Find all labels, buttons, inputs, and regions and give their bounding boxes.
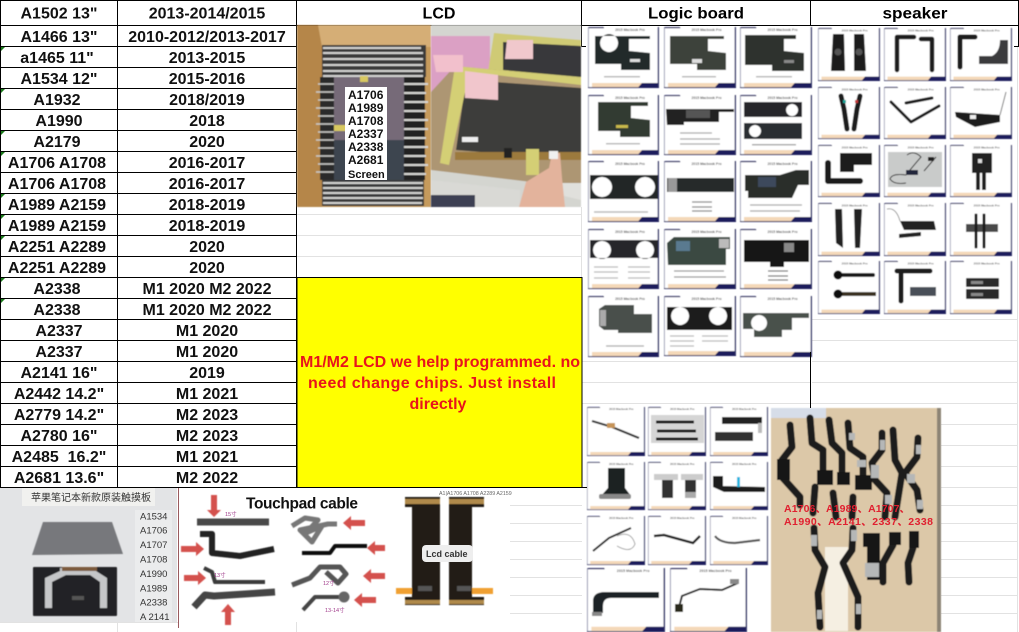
row A2337	[35, 323, 238, 340]
photo: boxed LCD screens	[297, 25, 431, 207]
card: logic board 5	[664, 95, 736, 155]
card: logic board 10	[588, 229, 659, 289]
row A1989 A2159 second: A1989 A2159	[8, 218, 106, 235]
card: logic board 4	[588, 95, 659, 155]
row A2681	[14, 470, 238, 487]
label: trackpad models: A1989	[140, 584, 167, 594]
card: speaker 7	[818, 145, 880, 197]
card: speaker 14	[884, 261, 946, 314]
row A1706 A1708 second	[8, 176, 245, 193]
cable size labels: 12寸	[323, 579, 335, 587]
row A2779: M2 2023	[176, 407, 238, 424]
LCD ribbons	[396, 497, 493, 605]
row A2779	[14, 407, 238, 424]
card: speaker 1	[818, 28, 880, 81]
table lines	[0, 0, 1019, 488]
row A2141: 2019	[189, 365, 225, 382]
row A1932: A1932	[33, 92, 81, 109]
LCD cable model note: A1|A1706 A1708 A2289 A2159	[439, 491, 512, 497]
card: logic board 6	[740, 95, 812, 155]
row A1466: A1466 13"	[21, 29, 97, 46]
card: cable 11	[670, 568, 747, 632]
row A2485: M1 2021	[176, 449, 238, 466]
card: speaker 15	[950, 261, 1012, 314]
label: trackpad models: A1708	[140, 554, 167, 566]
row A2141: A2141 16"	[21, 365, 97, 382]
row A2251 A2289: 2020	[189, 239, 225, 256]
row A2251 A2289 second: A2251 A2289	[8, 260, 106, 277]
card: cable 9	[710, 516, 768, 565]
label: trackpad models: A2338	[140, 598, 167, 608]
card: logic board 12	[740, 229, 812, 289]
card: logic board 3	[740, 27, 812, 88]
row A2338 second: A2338	[33, 302, 81, 319]
row A2780	[21, 428, 238, 445]
label: heat pipe models: A1990、A2141、2337、2338	[784, 516, 933, 528]
row A1990	[35, 113, 225, 130]
heading: Logic board: Logic board	[648, 6, 744, 22]
cable size labels: 13-14寸	[325, 606, 345, 614]
card: cable 6	[710, 462, 768, 510]
heading: speaker: speaker	[882, 6, 948, 22]
card: speaker 9	[950, 145, 1012, 197]
card: cable 5	[648, 462, 706, 510]
row A2337: A2337	[35, 323, 83, 340]
label: heat pipe models	[784, 503, 933, 528]
card: logic board 1	[588, 27, 659, 88]
card: speaker 4	[818, 87, 880, 139]
label: LCD models: A1989	[348, 101, 384, 115]
row A2485	[12, 449, 238, 466]
card: logic board 9	[740, 161, 812, 222]
label: Lcd cable: Lcd cable	[426, 549, 468, 559]
callout: M1/M2 LCD note: directly	[410, 396, 467, 413]
trackpad underside	[33, 567, 117, 616]
card: speaker 6	[950, 87, 1012, 139]
card: logic board 14	[664, 296, 736, 356]
row A2251 A2289 second	[8, 260, 225, 277]
row A2338 second	[33, 302, 272, 319]
row A1989 A2159 second: 2018-2019	[169, 218, 245, 235]
label: LCD models: A2337	[348, 127, 384, 141]
row A2251 A2289 second: 2020	[189, 260, 225, 277]
photo: LCD panels on cardboard	[431, 25, 581, 207]
row A1706 A1708 second: A1706 A1708	[8, 176, 106, 193]
cable size labels: 13寸	[214, 571, 226, 579]
row A1989 A2159	[8, 197, 245, 214]
row A1706 A1708 second: 2016-2017	[169, 176, 245, 193]
row A1534: A1534 12"	[21, 71, 97, 88]
card: cable 10	[587, 568, 665, 632]
card: speaker 3	[950, 28, 1012, 81]
label: LCD models	[345, 87, 387, 181]
row A2179: 2020	[189, 134, 225, 151]
label: trackpad models	[135, 510, 172, 623]
card: logic board 7	[588, 161, 659, 222]
row A2337: M1 2020	[176, 323, 238, 340]
label: trackpad models: A1707	[140, 540, 167, 551]
card: speaker 11	[884, 203, 946, 256]
row A2780: M2 2023	[176, 428, 238, 445]
row A1989 A2159: A1989 A2159	[8, 197, 106, 214]
row A2251 A2289: A2251 A2289	[8, 239, 106, 256]
row a1465: 2013-2015	[169, 50, 245, 67]
photo: trackpad	[0, 488, 177, 623]
label: trackpad title: 苹果笔记本新款原装触摸板	[31, 491, 151, 504]
callout: M1/M2 LCD note: need change chips. Just install	[308, 375, 556, 392]
row A1990: A1990	[35, 113, 83, 130]
label: trackpad models: A1706	[140, 526, 167, 536]
cable size labels	[214, 510, 345, 614]
row A2338: A2338	[33, 281, 81, 298]
card: speaker 2	[884, 28, 946, 81]
row A2251 A2289	[8, 239, 225, 256]
row A2338: M1 2020 M2 2022	[143, 281, 272, 298]
row A1502: A1502 13"	[21, 6, 97, 22]
table rows	[8, 6, 286, 487]
row A1990: 2018	[189, 113, 225, 130]
row A1706 A1708	[8, 155, 245, 172]
card: speaker 10	[818, 203, 880, 256]
card: cable 8	[648, 516, 706, 565]
row A1466: 2010-2012/2013-2017	[128, 29, 286, 46]
row A2141	[21, 365, 225, 382]
row A2337 second: A2337	[35, 344, 83, 361]
label: trackpad title	[22, 488, 155, 506]
compatibility table	[0, 0, 1019, 488]
column headings	[423, 6, 948, 22]
label: LCD models: A2681	[348, 153, 384, 167]
cable size labels: 15寸	[225, 510, 237, 518]
photo: touchpad cables	[178, 488, 385, 628]
row A2179: A2179	[33, 134, 81, 151]
card: speaker 8	[884, 145, 946, 197]
label: LCD models: Screen	[348, 169, 385, 181]
red model arrows	[181, 495, 385, 625]
card: speaker 12	[950, 203, 1012, 256]
label: heat pipe models: A1706、A1989、A1707、	[784, 503, 910, 515]
row A1989 A2159: 2018-2019	[169, 197, 245, 214]
row A1989 A2159 second	[8, 218, 245, 235]
card: logic board 15	[740, 296, 812, 357]
card: logic board 8	[664, 161, 736, 222]
black border fragments	[582, 352, 810, 488]
panel: speakers	[818, 28, 1012, 314]
card: cable 7	[587, 516, 645, 565]
row A2442: M1 2021	[176, 386, 238, 403]
row A2681: M2 2022	[176, 470, 238, 487]
row A1706 A1708: 2016-2017	[169, 155, 245, 172]
row A1534: 2015-2016	[169, 71, 245, 88]
card: cable 2	[648, 407, 706, 456]
label: LCD models: A2338	[348, 140, 384, 154]
card: cable 1	[587, 407, 645, 456]
label: trackpad models: A1990	[140, 569, 167, 580]
card: cable 3	[710, 407, 768, 456]
row A2338 second: M1 2020 M2 2022	[143, 302, 272, 319]
card: logic board 11	[664, 229, 736, 289]
row A2442	[14, 386, 238, 403]
row A1706 A1708: A1706 A1708	[8, 155, 106, 172]
panel: internal cables	[587, 407, 768, 632]
row A2779: A2779 14.2"	[14, 407, 104, 424]
card: logic board 2	[664, 27, 736, 88]
heading: LCD: LCD	[423, 6, 455, 22]
trackpad top face	[32, 522, 123, 555]
label: trackpad models: A1534	[140, 512, 167, 522]
row A2681: A2681 13.6"	[14, 470, 104, 487]
row A2485: A2485 16.2"	[12, 449, 106, 466]
row A1932	[33, 92, 245, 109]
row A2780: A2780 16"	[21, 428, 97, 445]
label: LCD models: A1706	[348, 88, 384, 102]
card: speaker 5	[884, 87, 946, 139]
row a1465	[20, 50, 245, 67]
row A2338	[33, 281, 272, 298]
heading: Touchpad cable: Touchpad cable	[246, 496, 358, 512]
photo: LCD cable	[396, 491, 512, 605]
row A2337 second: M1 2020	[176, 344, 238, 361]
label: trackpad models: A 2141	[140, 612, 170, 623]
photo: heat pipes	[771, 408, 941, 632]
row A2179	[33, 134, 225, 151]
label: LCD models: A1708	[348, 114, 384, 128]
spreadsheet note markers	[1, 47, 5, 303]
cable shapes	[194, 518, 367, 610]
card: cable 4	[587, 462, 645, 510]
row A2337 second	[35, 344, 238, 361]
callout: M1/M2 LCD note: M1/M2 LCD we help programmed. no	[300, 354, 580, 371]
card: logic board 13	[588, 296, 659, 357]
callout: M1/M2 LCD note	[297, 278, 582, 488]
row A1534	[21, 71, 245, 88]
panel: logic boards	[588, 27, 812, 357]
row A2442: A2442 14.2"	[14, 386, 104, 403]
row a1465: a1465 11"	[20, 50, 94, 67]
row A1932: 2018/2019	[169, 92, 245, 109]
row A1502: 2013-2014/2015	[149, 6, 265, 22]
row A1502	[21, 6, 265, 22]
card: speaker 13	[818, 261, 880, 314]
row A1466	[21, 29, 286, 46]
